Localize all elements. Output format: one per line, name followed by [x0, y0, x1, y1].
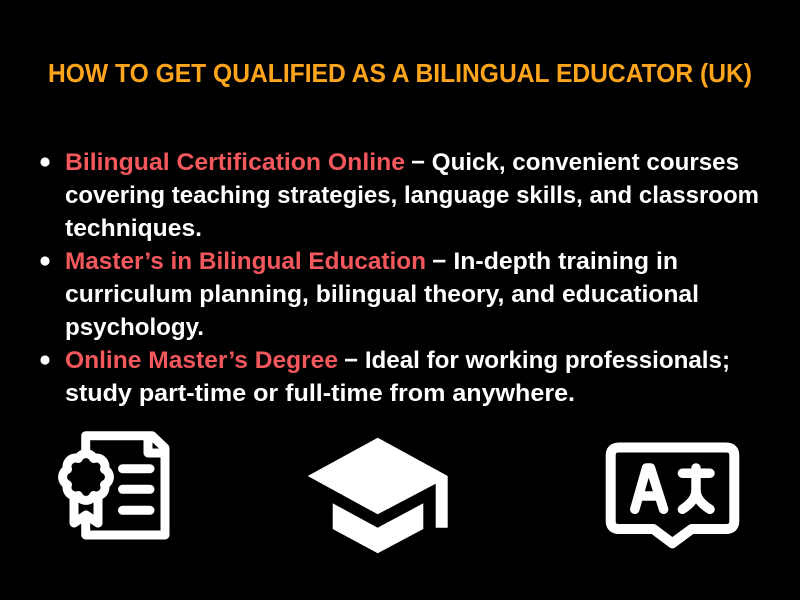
bullet item: master's: curriculum planning, bilingual theory, and educational	[65, 281, 699, 308]
bullet item: certification: techniques.	[65, 215, 202, 242]
bullet item: master's: − In-depth training in	[432, 248, 678, 275]
icon: language translation bubble	[611, 448, 734, 543]
bullet item: certification: − Quick, convenient courses	[411, 149, 739, 176]
title: HOW TO GET QUALIFIED AS A BILINGUAL EDUCATOR (UK)	[48, 60, 752, 88]
bullet item: online master's: study part-time or full-time from anywhere.	[65, 380, 575, 407]
bullet item: certification: Bilingual Certification Online	[65, 149, 405, 176]
bullet item: online master's: − Ideal for working professionals;	[344, 347, 730, 374]
bullet item: online master's	[40, 347, 730, 407]
icon: graduation cap	[308, 438, 448, 553]
bullet item: online master's: Online Master’s Degree	[65, 347, 338, 374]
bullet item: certification	[40, 149, 759, 242]
icon: certificate	[63, 436, 165, 535]
bullet item: master's: Master’s in Bilingual Education	[65, 248, 426, 275]
bullet list	[40, 149, 759, 407]
bullet item: master's	[40, 248, 699, 341]
bullet item: certification: covering teaching strategies, language skills, and classroom	[65, 182, 759, 209]
bullet item: master's: psychology.	[65, 314, 204, 341]
